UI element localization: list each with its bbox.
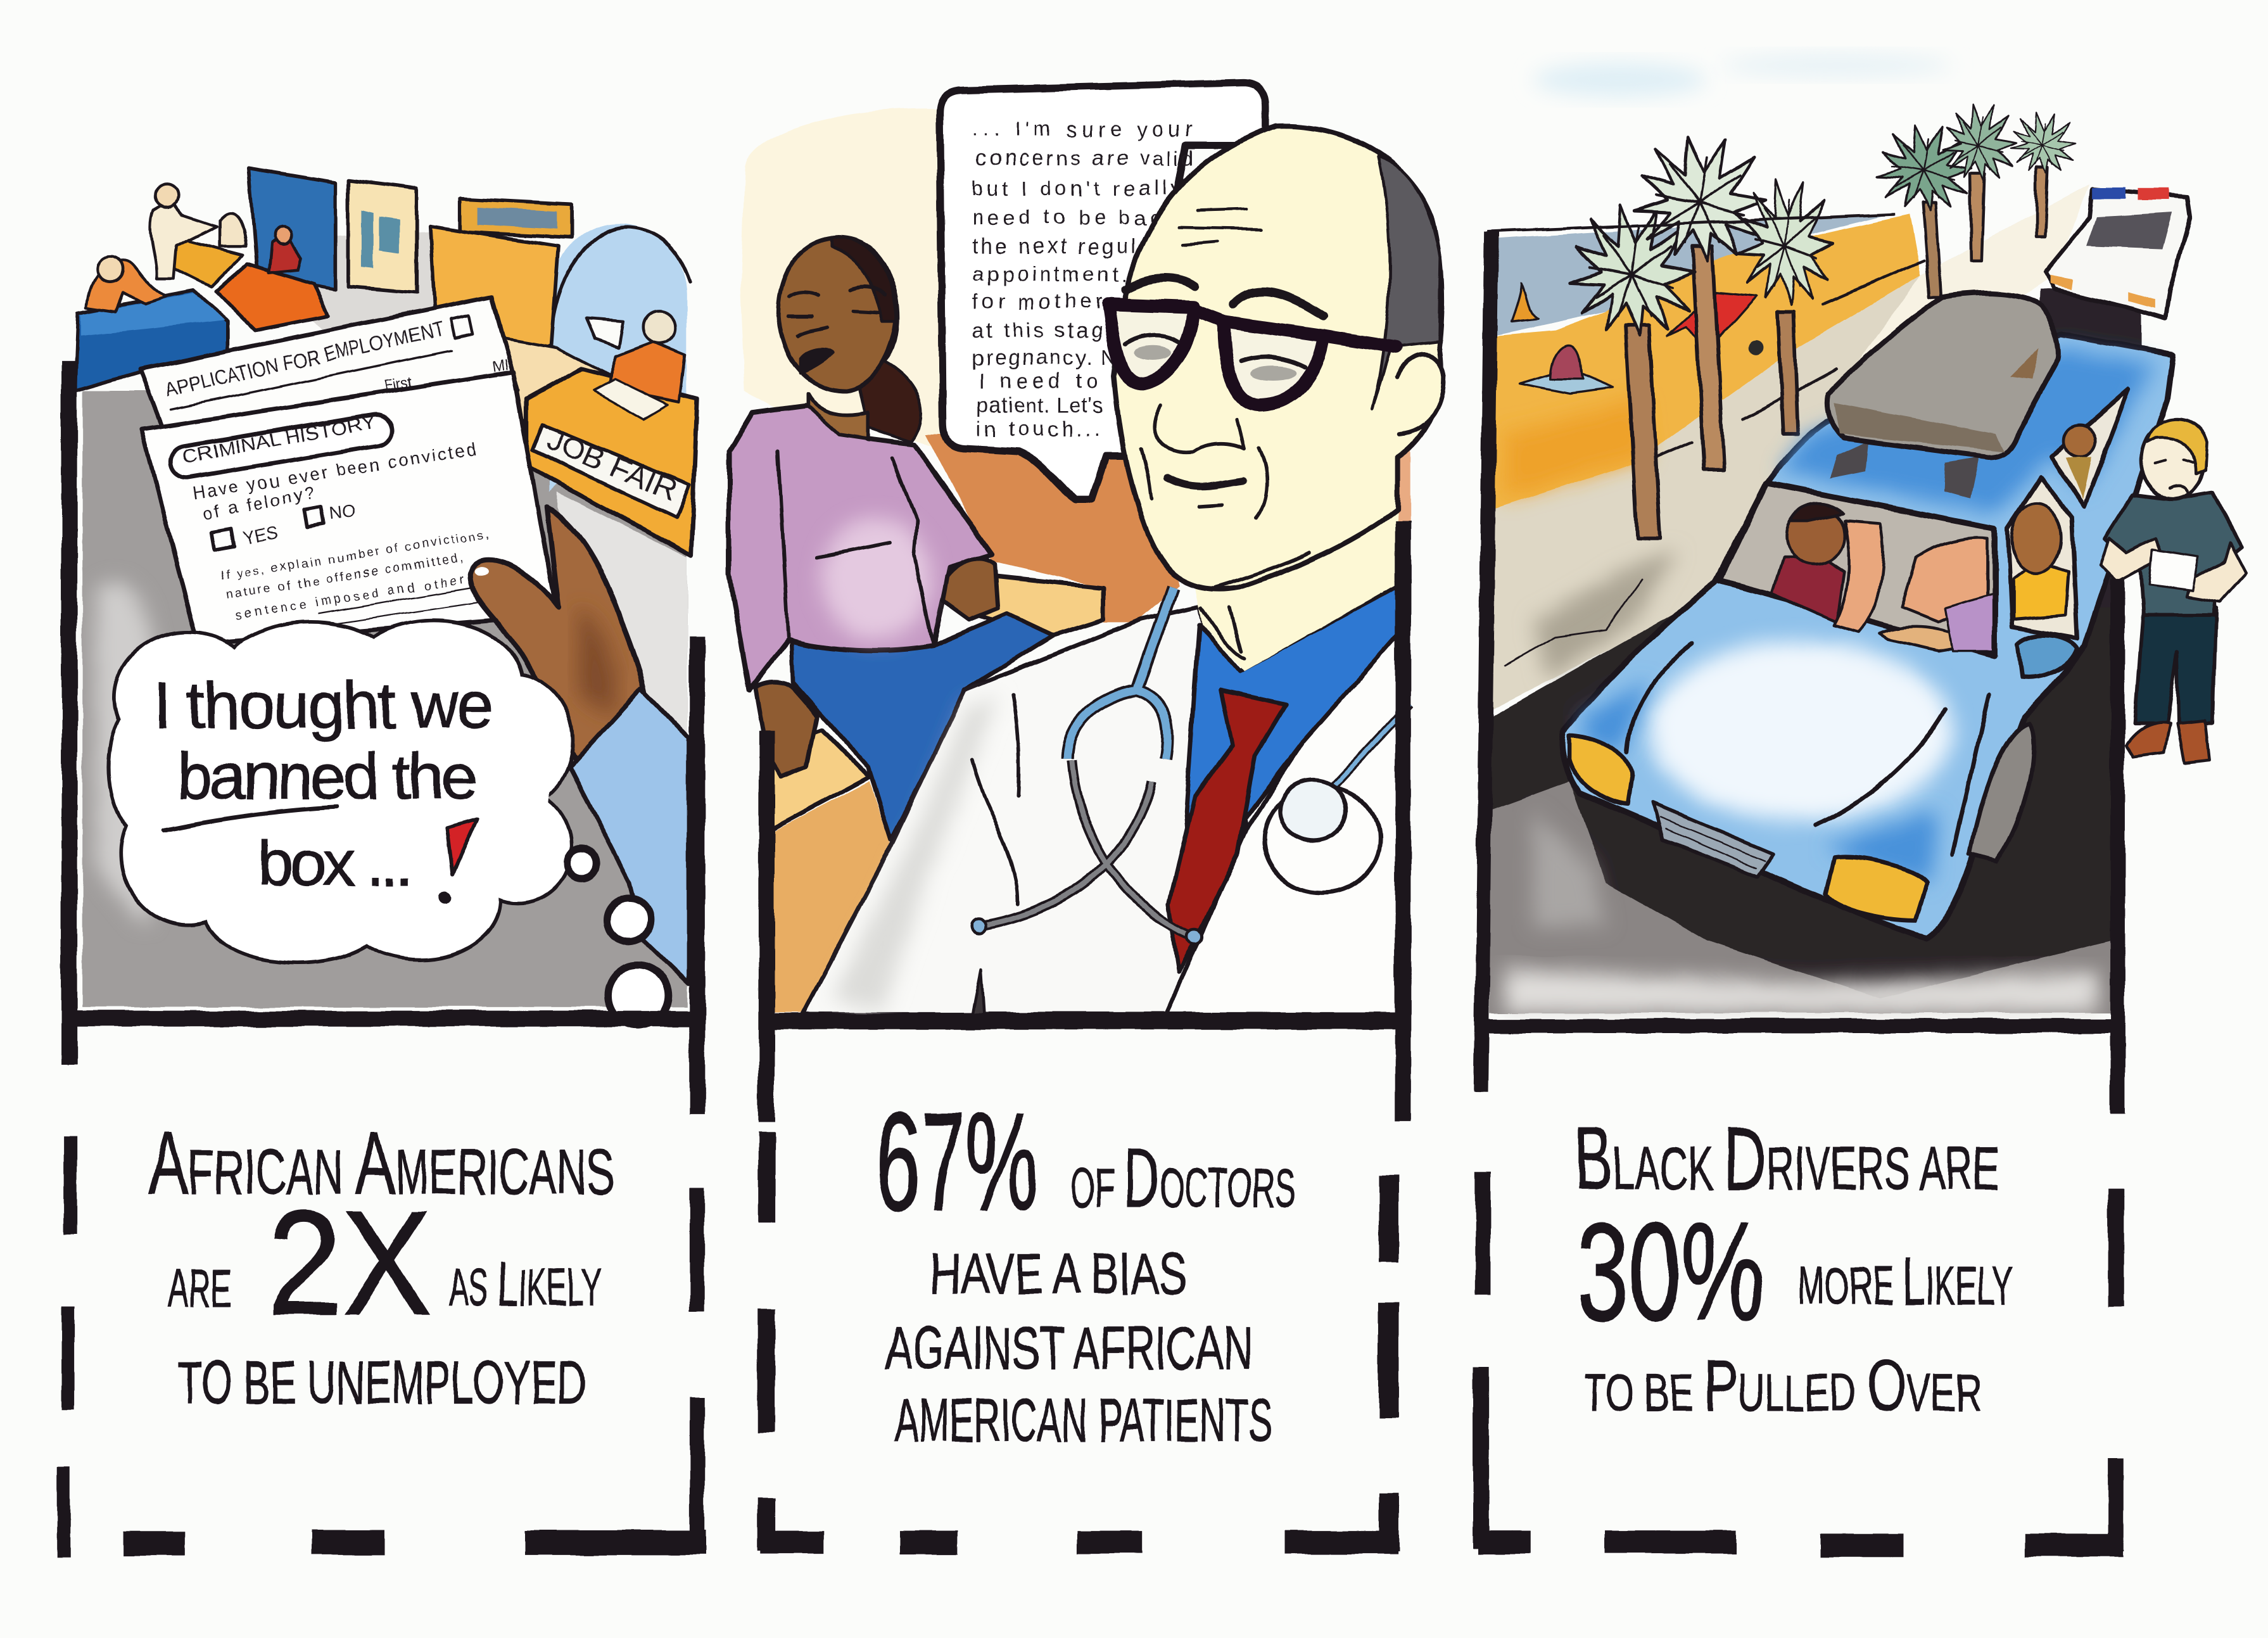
speech text: in touch...	[977, 417, 1101, 441]
passengers	[1772, 426, 2096, 651]
speech text: appointment. I	[972, 262, 1146, 286]
job fair background booths	[75, 168, 690, 492]
job fair desk	[526, 311, 697, 556]
neck and shirt	[1186, 580, 1409, 897]
sleeve	[570, 689, 688, 984]
coat folds	[972, 695, 1019, 905]
speech text: patient. Let's	[977, 394, 1104, 417]
panel frame	[764, 521, 1403, 1121]
speech bubble	[940, 83, 1265, 499]
hood creases	[1627, 644, 1989, 854]
police officer	[2100, 418, 2246, 763]
speech text: the next regular	[972, 235, 1160, 258]
thought bubble	[110, 622, 571, 961]
against african: AGAINST AFRICAN	[885, 1314, 1253, 1382]
application sheets: NO	[328, 501, 356, 523]
stethoscope	[972, 588, 1410, 943]
application sheets	[141, 297, 557, 644]
of doctors: OF DOCTORS	[1070, 1131, 1296, 1225]
caption: drivers	[1574, 1109, 2013, 1426]
are: ARE	[168, 1260, 231, 1318]
patient	[729, 238, 1053, 839]
eyes	[1125, 336, 1305, 367]
panel: health care illustration	[729, 83, 1443, 1121]
job fair sign	[532, 424, 690, 518]
red exclamation mark	[438, 819, 478, 904]
as likely: AS LIKELY	[448, 1248, 602, 1319]
face	[1114, 126, 1442, 590]
thought bubble: banned the	[177, 740, 478, 813]
application sheets: If yes, explain number of convictions,	[220, 527, 490, 583]
speech text: concerns are valid	[977, 147, 1193, 170]
driver's side window	[2008, 478, 2077, 638]
police car	[2045, 187, 2190, 319]
application sheets: Have you ever been convicted	[191, 439, 478, 503]
thought bubble: I thought we	[153, 669, 493, 742]
rear window	[2051, 390, 2129, 507]
windshield	[1720, 483, 1994, 656]
application sheets: nature of the offense committed,	[225, 551, 464, 602]
roof suitcase	[1827, 293, 2059, 499]
have a bias: HAVE A BIAS	[930, 1241, 1188, 1306]
hand holding paper	[470, 507, 648, 759]
application sheets: sentence imposed and other	[234, 573, 465, 623]
wheel	[1970, 723, 2034, 861]
2x statistic: 2X	[268, 1181, 431, 1345]
black drivers heading: BLACK DRIVERS ARE	[1574, 1109, 1999, 1209]
floor	[82, 391, 687, 1007]
orange wall	[926, 435, 1179, 622]
30% statistic: 30%	[1576, 1195, 1764, 1349]
grille	[1653, 803, 1773, 877]
dashed caption frames	[63, 1131, 2124, 1557]
more likely: MORE LIKELY	[1798, 1244, 2013, 1318]
beach scenery	[1493, 184, 2090, 709]
application sheets: of a felony?	[201, 483, 315, 523]
hair	[1372, 156, 1441, 410]
to be pulled over: TO BE PULLED OVER	[1584, 1346, 1982, 1426]
speech text: I need to	[979, 369, 1098, 393]
doctor	[803, 126, 1443, 1014]
african americans heading: AFRICAN AMERICANS	[149, 1114, 615, 1214]
ear	[1397, 355, 1443, 435]
palm trees	[1569, 103, 2075, 538]
panel frame	[1481, 232, 2117, 1114]
road	[1490, 289, 2141, 1013]
nose and mouth	[1141, 405, 1309, 658]
brows and wrinkles	[1125, 278, 1324, 315]
tie	[1169, 690, 1286, 972]
glasses	[1108, 304, 1396, 405]
headlights	[1569, 735, 1631, 804]
criminal history heading	[168, 412, 395, 480]
panel: policing illustration	[1481, 103, 2246, 1114]
application sheets: CRIMINAL HISTORY	[181, 411, 378, 467]
speech text: need to be back	[972, 206, 1175, 229]
application sheets: MI	[491, 357, 510, 375]
job fair desk: JOB FAIR	[541, 422, 682, 508]
67% statistic: 67%	[875, 1085, 1039, 1240]
application sheets: First	[383, 373, 414, 394]
speech text: but I don't really	[972, 177, 1182, 201]
speech text: ... I'm sure your	[972, 118, 1192, 141]
thought bubble: box ...	[258, 827, 414, 899]
speech text: for mothers	[972, 290, 1117, 314]
coat	[803, 606, 1247, 1014]
application sheets: YES	[242, 523, 279, 548]
american patients: AMERICAN PATIENTS	[894, 1387, 1273, 1454]
mirror	[2018, 635, 2077, 678]
table and floor	[773, 570, 1104, 1013]
caption: doctors	[875, 1085, 1296, 1454]
blue car	[1562, 293, 2172, 937]
speech text	[972, 118, 1193, 441]
to be unemployed: TO BE UNEMPLOYED	[178, 1349, 586, 1417]
panel frame	[70, 362, 697, 1114]
wash background	[740, 108, 940, 448]
application sheets: APPLICATION FOR EMPLOYMENT	[164, 317, 445, 401]
caption: employment	[149, 1114, 615, 1417]
speech text: pregnancy. N	[972, 346, 1117, 370]
speech text: at this stage	[972, 319, 1117, 342]
thought dots	[567, 849, 668, 1026]
panel: employment illustration	[70, 168, 697, 1114]
